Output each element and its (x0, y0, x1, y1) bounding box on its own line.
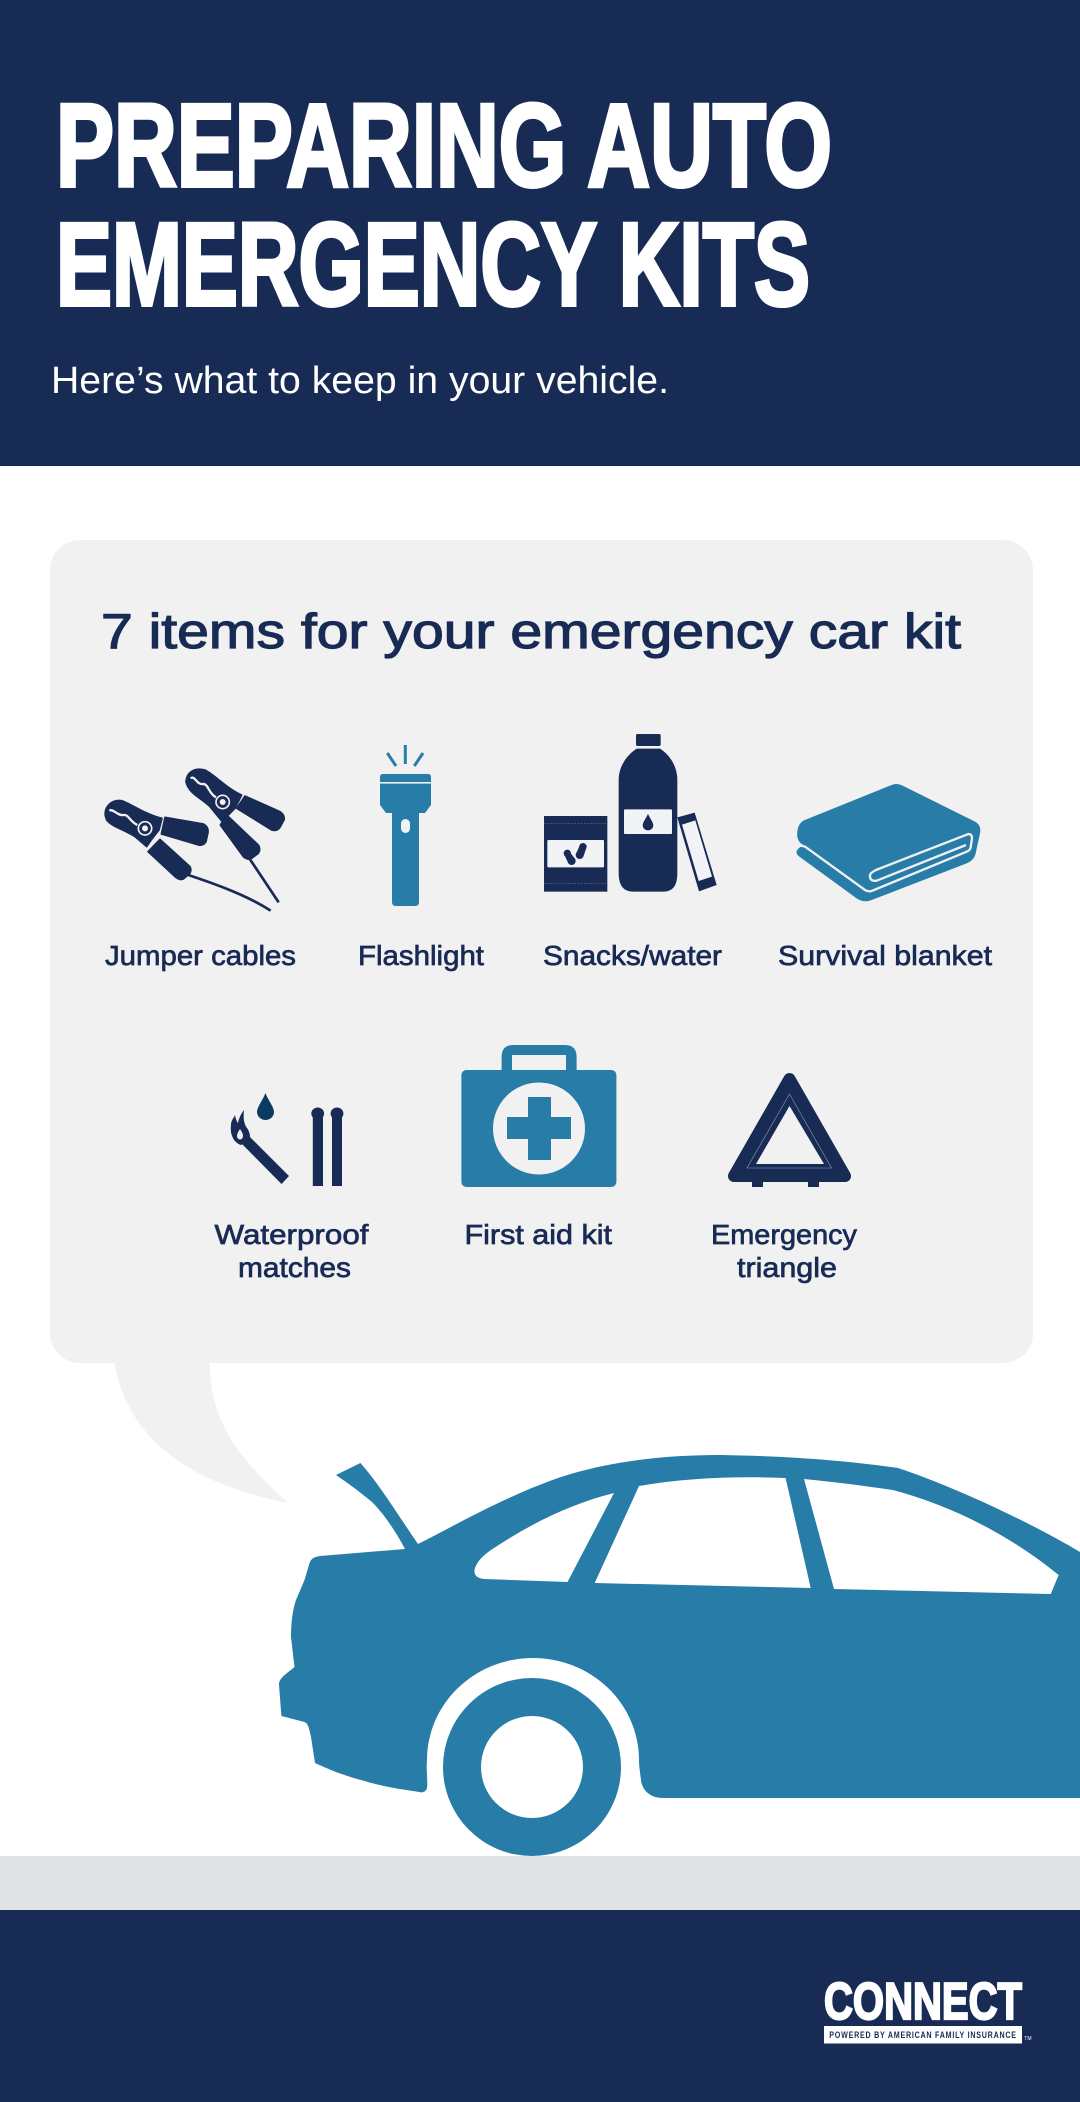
label: flashlight: Flashlight (358, 940, 484, 971)
logo: connect: TM (1024, 2036, 1032, 2042)
logo: connect: POWERED BY AMERICAN FAMILY INSURANCE (829, 2030, 1017, 2041)
icon: emergency triangle (734, 1079, 845, 1187)
icon: snacks and water (544, 734, 717, 892)
icon: survival blanket (796, 784, 980, 901)
label: jumper cables: Jumper cables (105, 940, 296, 971)
label: emergency triangle: Emergency (711, 1219, 857, 1250)
icon: jumper cables (105, 769, 284, 911)
title: PREPARING AUTO (56, 80, 832, 212)
speech bubble panel (50, 540, 1033, 1503)
ground strip (0, 1856, 1080, 1910)
label: survival blanket: Survival blanket (778, 940, 992, 971)
label: first aid kit: First aid kit (464, 1219, 612, 1250)
icon: first aid kit (461, 1045, 616, 1187)
label: emergency triangle: triangle (737, 1252, 837, 1283)
label: waterproof matches (214, 1219, 369, 1283)
label: waterproof matches: matches (238, 1252, 351, 1283)
label: snacks and water: Snacks/water (543, 940, 722, 971)
title (56, 80, 832, 331)
front wheel (443, 1678, 621, 1856)
car with open hood (279, 1455, 1080, 1856)
label: waterproof matches: Waterproof (214, 1219, 369, 1250)
subtitle: Here’s what to keep in your vehicle. (51, 360, 669, 402)
icon: flashlight (380, 745, 431, 906)
logo: connect: CONNECT (824, 1973, 1022, 2031)
panel heading: 7 items for your emergency car kit (101, 605, 961, 659)
icon: waterproof matches (231, 1093, 343, 1186)
footer band (0, 1910, 1080, 2102)
label: emergency triangle (711, 1219, 857, 1283)
logo: connect (824, 1973, 1032, 2044)
header band (0, 0, 1080, 466)
